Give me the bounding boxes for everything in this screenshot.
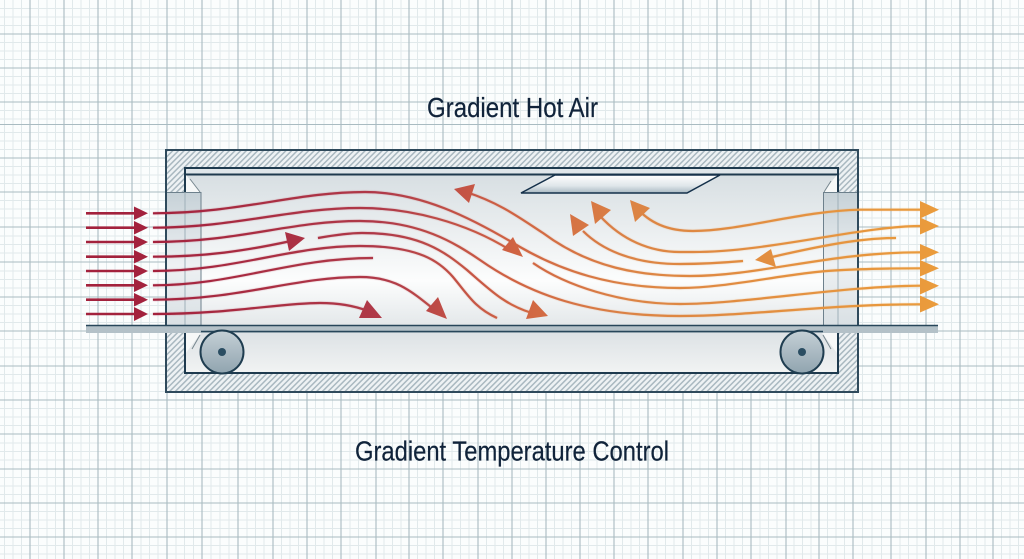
right conveyor roller xyxy=(780,330,824,374)
conveyor belt xyxy=(86,325,938,333)
left conveyor roller xyxy=(200,330,244,374)
deflector plate xyxy=(521,175,720,193)
caption: Gradient Temperature Control: Gradient Temperature Control xyxy=(355,436,669,466)
hot air flow lines xyxy=(153,192,922,318)
right outlet port xyxy=(823,150,858,326)
upper chamber xyxy=(185,168,838,325)
inlet arrows xyxy=(86,206,148,321)
hatched outer wall xyxy=(166,150,858,392)
flow arrowheads xyxy=(285,184,939,319)
heading: Gradient Hot Air: Gradient Hot Air xyxy=(427,92,598,123)
left inlet port xyxy=(166,150,201,326)
ceiling band xyxy=(185,168,838,174)
lower port corners xyxy=(186,333,837,353)
oven housing cross-section xyxy=(166,150,858,392)
lower chamber xyxy=(185,333,838,373)
